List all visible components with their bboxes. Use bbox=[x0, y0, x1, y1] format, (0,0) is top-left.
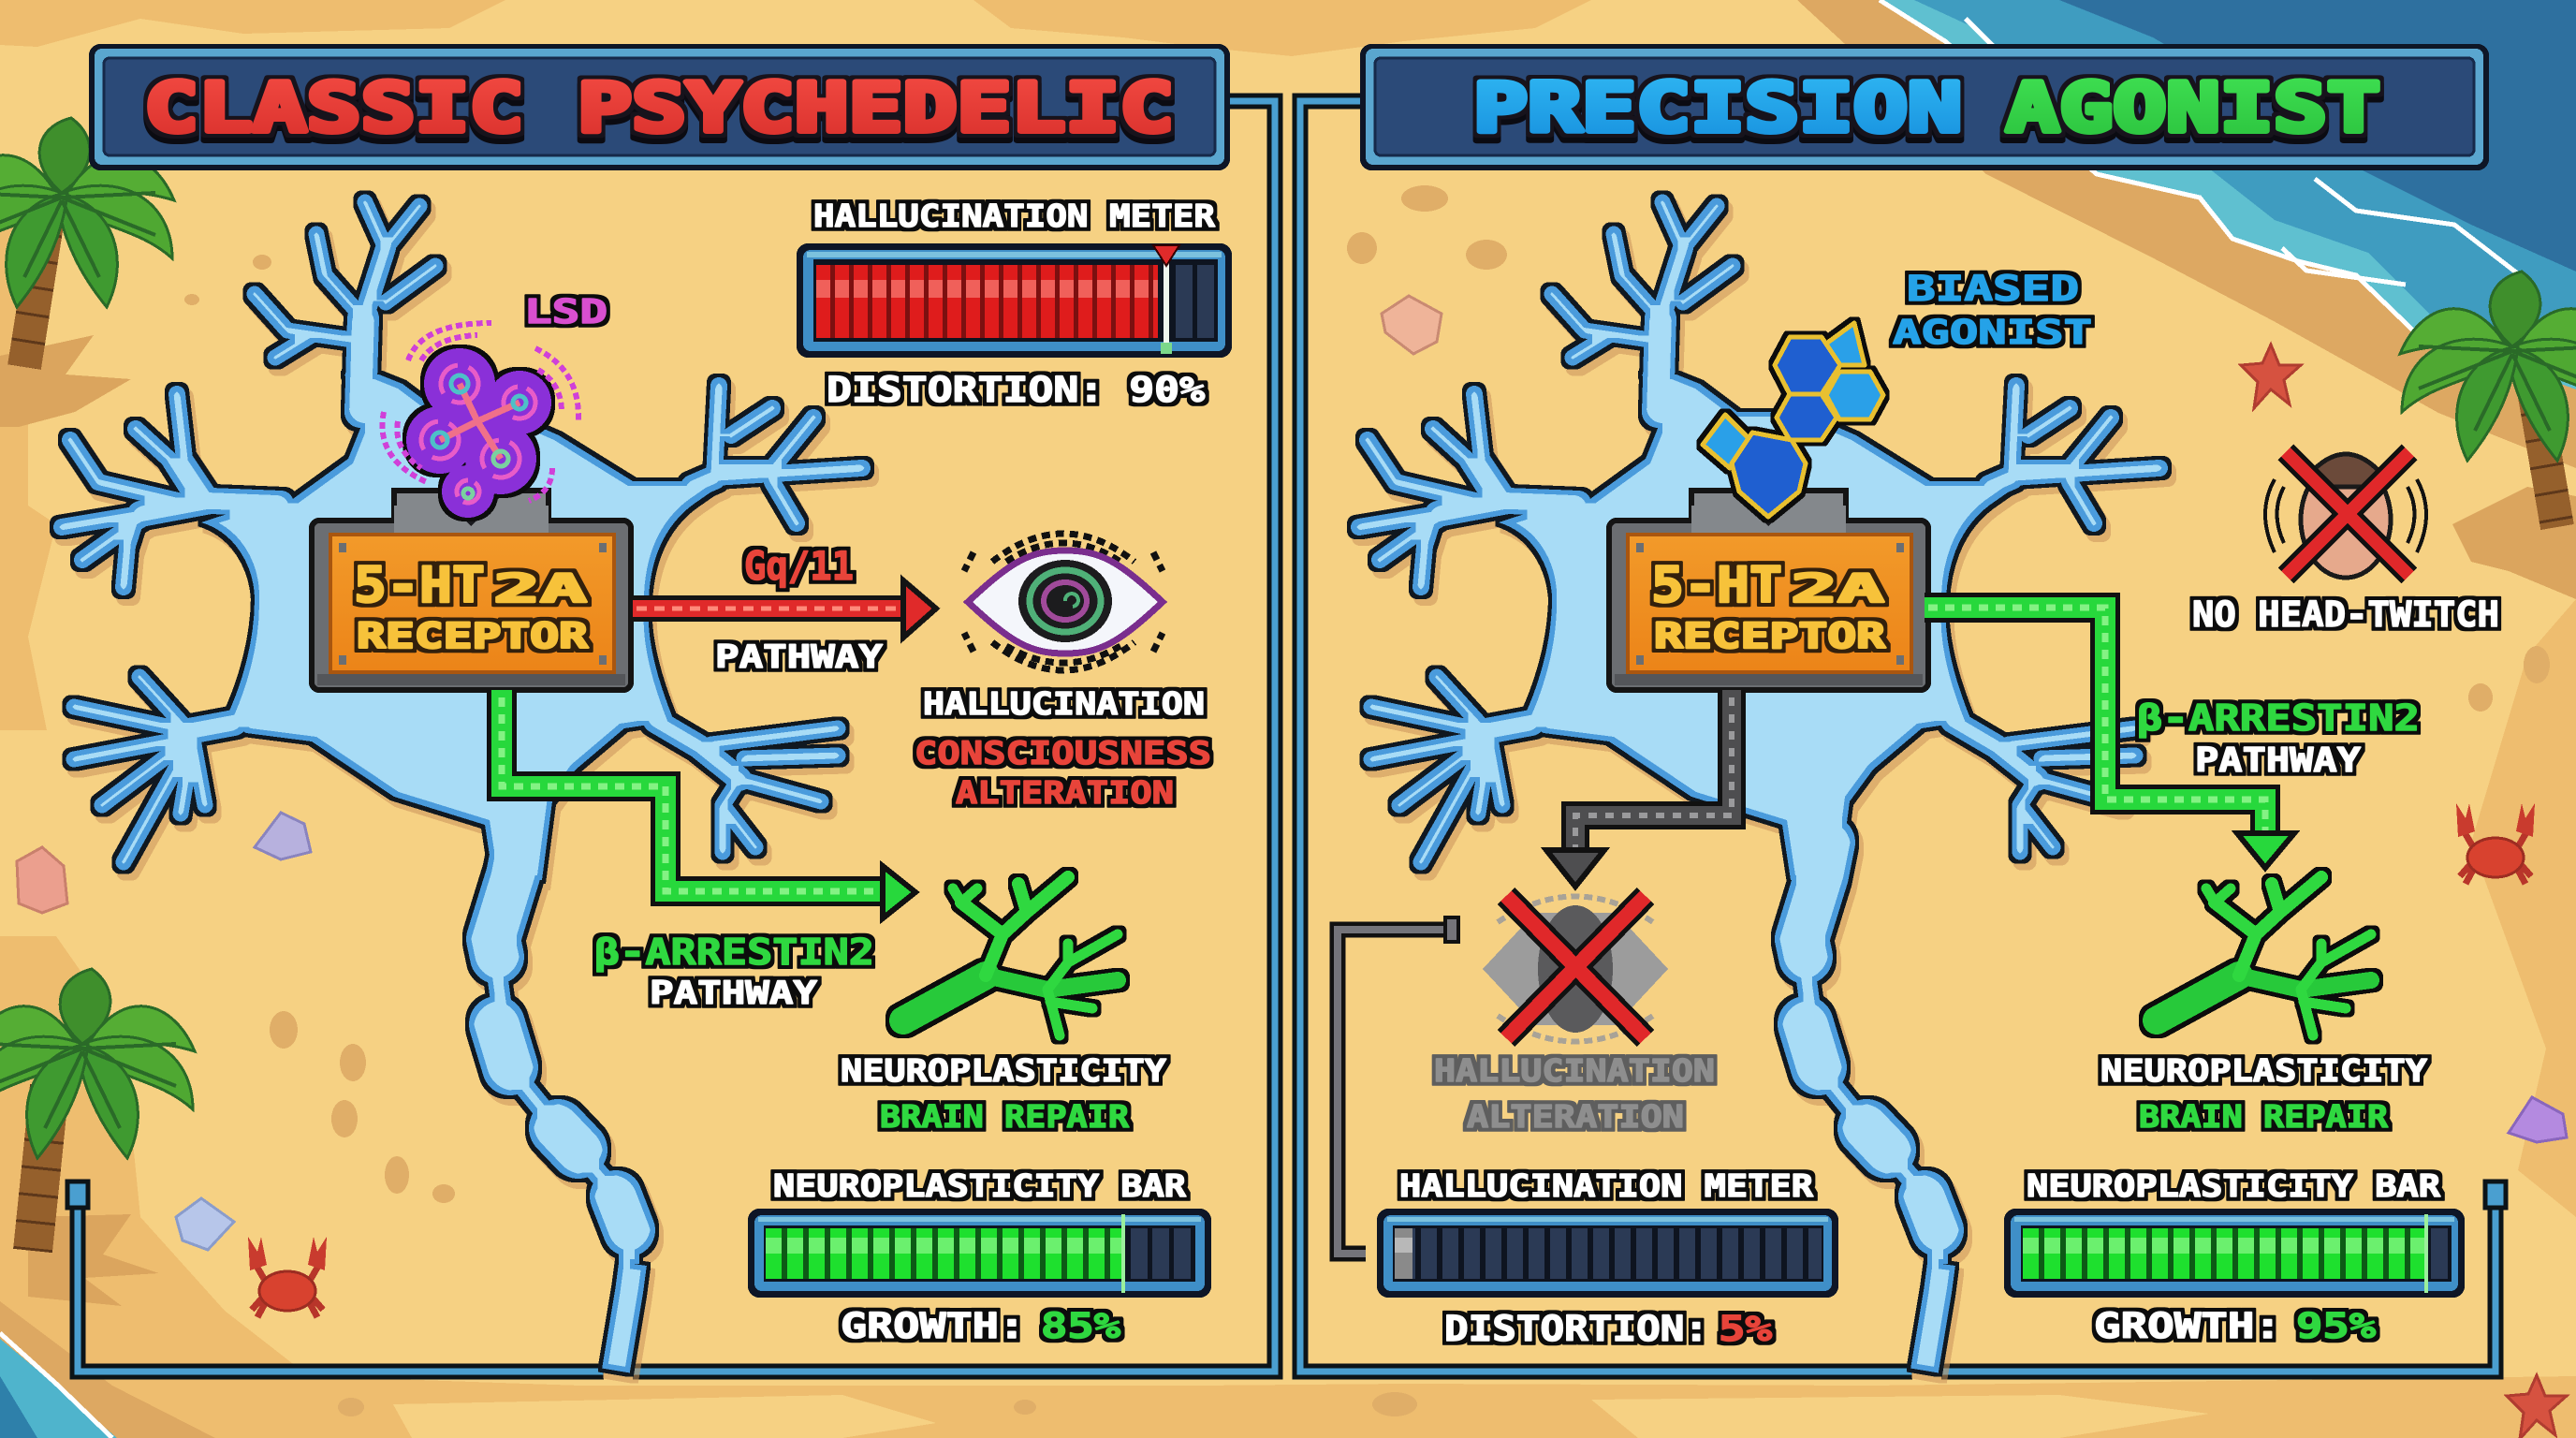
icon: hallucinating eye bbox=[964, 534, 1163, 670]
beta-arrestin2 label: precision: PATHWAY bbox=[2195, 741, 2361, 780]
pathway label: PATHWAY bbox=[715, 638, 884, 676]
biased agonist label bbox=[1893, 269, 2092, 352]
hallucination meter: precision: HALLUCINATION METER bbox=[1399, 1167, 1813, 1204]
hallucination meter: precision: 5% bbox=[1719, 1309, 1773, 1349]
beta-arrestin2 label: classic: PATHWAY bbox=[650, 975, 818, 1012]
neuroplasticity labels left: NEUROPLASTICITY bbox=[841, 1052, 1166, 1089]
neuroplasticity labels left: BRAIN REPAIR bbox=[880, 1098, 1129, 1135]
biased agonist label: AGONIST bbox=[1893, 314, 2092, 352]
shells, crabs and starfish bbox=[17, 296, 2567, 1438]
hallucination meter: precision: DISTORTION: bbox=[1444, 1309, 1708, 1349]
LSD molecule icon bbox=[382, 323, 578, 518]
receptor left: 5-HT2A: 2A bbox=[493, 565, 587, 611]
receptor right: 5-HT2A: RECEPTOR bbox=[1654, 616, 1886, 656]
heading: precision agonist: AGONIST bbox=[2006, 68, 2380, 147]
neuron: precision agonist bbox=[1359, 202, 2159, 1371]
hallucination meter: classic: HALLUCINATION METER bbox=[813, 198, 1215, 234]
icon: no head twitch bbox=[2265, 452, 2426, 578]
footprints and sand marks bbox=[184, 185, 2550, 1416]
eye effect labels: CONSCIOUSNESS bbox=[915, 735, 1211, 772]
heading: precision agonist bbox=[1360, 44, 2489, 170]
panel frame: precision agonist bbox=[1300, 101, 2506, 1372]
neuroplasticity labels right: BRAIN REPAIR bbox=[2139, 1098, 2388, 1135]
heading: classic psychedelic bbox=[89, 44, 1230, 170]
neuroplasticity bar: precision: NEUROPLASTICITY BAR bbox=[2027, 1167, 2440, 1204]
neuroplasticity bar: classic: 85% bbox=[1041, 1306, 1121, 1346]
neuroplasticity bar: precision bbox=[2004, 1167, 2465, 1346]
receptor right: 5-HT2A bbox=[1609, 491, 1928, 690]
hallucination meter: precision bbox=[1377, 1167, 1838, 1349]
beta-arrestin2 label: classic bbox=[594, 932, 874, 1012]
eye effect labels bbox=[915, 685, 1211, 811]
neuroplasticity labels right: NEUROPLASTICITY bbox=[2100, 1052, 2427, 1089]
hallucination meter: classic: DISTORTION: 90% bbox=[827, 370, 1206, 410]
receptor right: 5-HT2A: 2A bbox=[1791, 565, 1884, 611]
neuroplasticity bar: precision: GROWTH: bbox=[2094, 1306, 2281, 1346]
neuroplasticity bar: precision: 95% bbox=[2296, 1306, 2377, 1346]
biased agonist label: BIASED bbox=[1907, 269, 2079, 309]
icon: neuroplasticity sprig right bbox=[2157, 877, 2371, 1035]
receptor left: 5-HT2A: 5-HT bbox=[354, 557, 485, 614]
beta-arrestin2 arrow: classic bbox=[502, 690, 915, 918]
beta-arrestin2 label: classic: β-ARRESTIN2 bbox=[594, 932, 874, 973]
neuroplasticity bar: classic: NEUROPLASTICITY BAR bbox=[773, 1167, 1186, 1204]
beta-arrestin2 arrow: precision bbox=[1925, 608, 2294, 868]
receptor left: 5-HT2A bbox=[312, 491, 631, 690]
greyed hallucination labels: HALLUCINATION bbox=[1434, 1052, 1715, 1089]
palm tree lower left bbox=[0, 969, 195, 1306]
Gq/11 label: Gq/11 bbox=[744, 543, 854, 589]
palm tree right bbox=[2400, 271, 2576, 599]
palm tree top left bbox=[0, 118, 174, 427]
receptor right: 5-HT2A: 5-HT bbox=[1651, 557, 1782, 614]
neuroplasticity labels left bbox=[841, 1052, 1166, 1135]
receptor left: 5-HT2A: RECEPTOR bbox=[357, 616, 589, 656]
biased agonist molecule icon bbox=[1703, 323, 1883, 517]
icon: crossed-out eye bbox=[1483, 896, 1668, 1041]
hallucination meter: classic bbox=[797, 198, 1232, 410]
greyed hallucination labels: ALTERATION bbox=[1467, 1098, 1684, 1135]
heading: precision agonist: PRECISION bbox=[1473, 68, 1962, 147]
neuroplasticity bar: classic: GROWTH: bbox=[841, 1306, 1025, 1346]
ocean bottom left bbox=[0, 1301, 215, 1438]
eye effect labels: HALLUCINATION bbox=[923, 685, 1205, 722]
neuroplasticity bar: classic bbox=[748, 1167, 1211, 1346]
LSD label: LSD bbox=[524, 293, 607, 331]
blocked grey pathway arrow bbox=[1546, 690, 1732, 887]
bracket connector from meter to eye bbox=[1338, 917, 1458, 1254]
greyed hallucination labels bbox=[1434, 1052, 1715, 1135]
arrow: Gq/11 pathway bbox=[633, 580, 936, 638]
eye effect labels: ALTERATION bbox=[956, 774, 1174, 811]
beta-arrestin2 label: precision: β-ARRESTIN2 bbox=[2137, 697, 2420, 739]
no head-twitch label: NO HEAD-TWITCH bbox=[2192, 594, 2499, 635]
neuron: classic psychedelic bbox=[62, 202, 862, 1371]
icon: neuroplasticity sprig left bbox=[903, 877, 1118, 1035]
neuroplasticity labels right bbox=[2100, 1052, 2427, 1135]
ocean top right bbox=[1797, 0, 2576, 468]
heading: classic psychedelic: CLASSIC PSYCHEDELIC bbox=[144, 68, 1174, 147]
panel frame: classic psychedelic bbox=[67, 101, 1275, 1372]
beta-arrestin2 label: precision bbox=[2137, 697, 2420, 780]
